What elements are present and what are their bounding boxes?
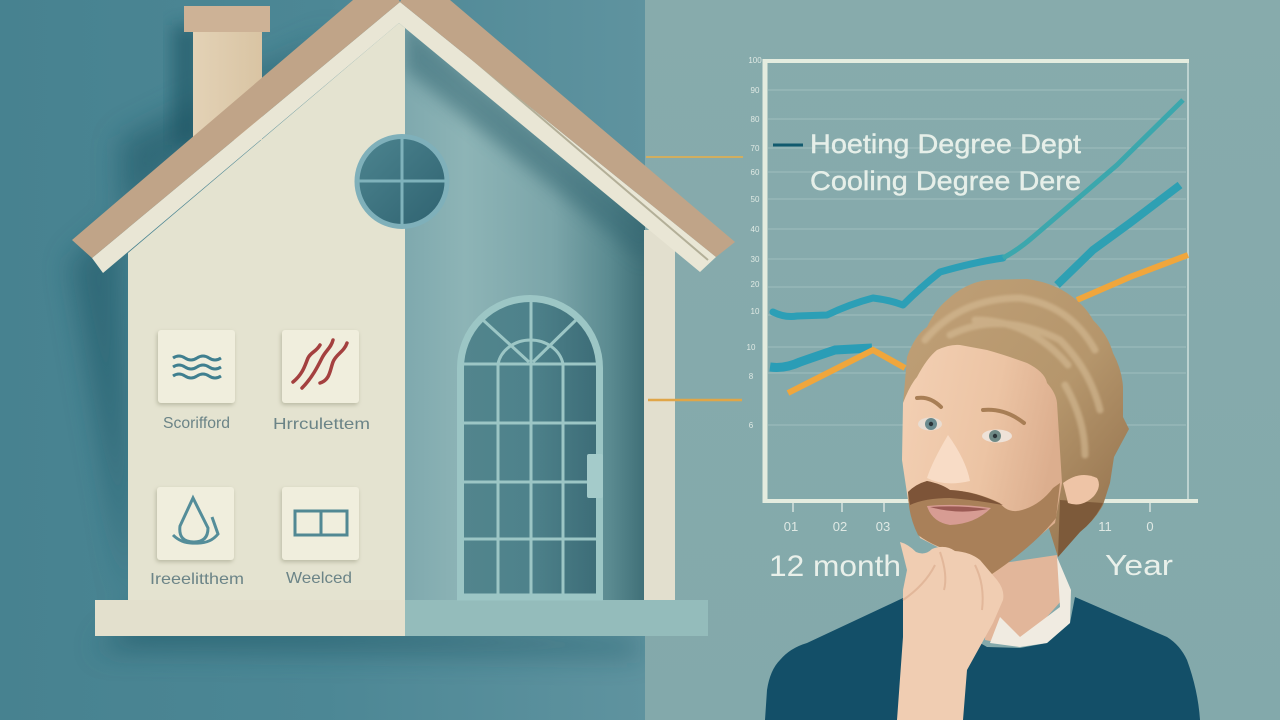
y axis tick labels: 30 [751,255,760,264]
ear [1063,475,1099,504]
round attic window [357,136,447,226]
mouth [927,505,991,525]
chimney shadow [172,25,202,145]
sweater [765,597,1200,720]
legend key [773,144,803,146]
x axis tick labels: 01 [784,519,798,534]
y axis tick labels: 10 [751,307,760,316]
icon label: heat streaks: Hrrculettem [273,416,370,433]
icon card: heat streaks [281,330,359,405]
chart gridlines [768,90,1186,425]
y axis tick labels: 50 [751,195,760,204]
right eye [982,430,1012,442]
face [902,345,1062,575]
heating series lower line [1057,185,1180,285]
base ledge: cream half [95,600,405,636]
nose [927,435,970,483]
line chart [747,56,1198,583]
y axis tick labels: 8 [749,372,754,381]
y axis tick labels: 40 [751,225,760,234]
eyebrows [917,398,1024,423]
chimney [184,6,270,140]
y axis tick labels: 20 [751,280,760,289]
y axis tick labels: 60 [751,168,760,177]
roof fascia [92,2,716,273]
x axis tick labels: 0 [1146,519,1154,534]
icon label: window: Weelced [286,570,352,587]
icon label: water drop: Ireeelitthem [150,571,244,588]
heating series upper line, right segment [1003,100,1183,258]
connector line upper [646,156,743,158]
legend: Cooling Degree Dere [810,166,1081,196]
roof [72,0,735,258]
finger creases [903,552,983,610]
wall shadow under fascia [405,28,641,249]
chart axes [763,59,1198,512]
house wall: blue half [405,28,645,600]
left teal background panel [0,0,646,720]
base ledge: blue half [405,600,708,636]
left eye [918,418,942,430]
fist and arm [897,542,1003,720]
orange series left [788,350,905,393]
right corner post [644,230,675,600]
legend [773,129,1082,196]
icon label: waves: Scorifford [163,415,230,432]
connector line lower [648,399,742,401]
x axis tick labels [784,519,1154,534]
right pale background panel [645,0,1280,720]
x axis tick labels: 03 [876,519,890,534]
y axis tick labels: 70 [751,144,760,153]
y axis tick labels [747,56,762,430]
y axis tick labels: 90 [751,86,760,95]
house illustration [70,0,735,655]
orange series right [1077,255,1188,300]
house cast shadow [70,30,640,655]
house wall: cream half [128,23,405,600]
hair back [903,279,1129,557]
x axis tick labels: 11 [1098,519,1112,534]
thinking man [765,279,1200,720]
x axis title: months: 12 month [769,550,901,583]
dark hair under ear [1058,500,1103,557]
beard [908,481,1060,574]
icon card: window [281,487,359,562]
fascia groove [410,6,708,260]
x axis tick labels: 02 [833,519,847,534]
hair highlights [925,298,1100,455]
y axis tick labels: 100 [748,56,762,65]
arched window door [460,299,603,597]
icon card: waves [157,330,235,405]
icon card: water drop [156,487,234,562]
neck [985,555,1062,647]
left cooling line [770,348,872,367]
door handle [587,454,603,498]
y axis tick labels: 6 [749,421,754,430]
moustache [908,481,1003,505]
y axis tick labels: 10 [747,343,756,352]
x axis title: year: Year [1105,550,1173,582]
legend labels: Hoeting Degree Dept [810,129,1082,159]
heating series upper line, left segment [773,258,1003,316]
y axis tick labels: 80 [751,115,760,124]
shirt collar [990,557,1071,647]
